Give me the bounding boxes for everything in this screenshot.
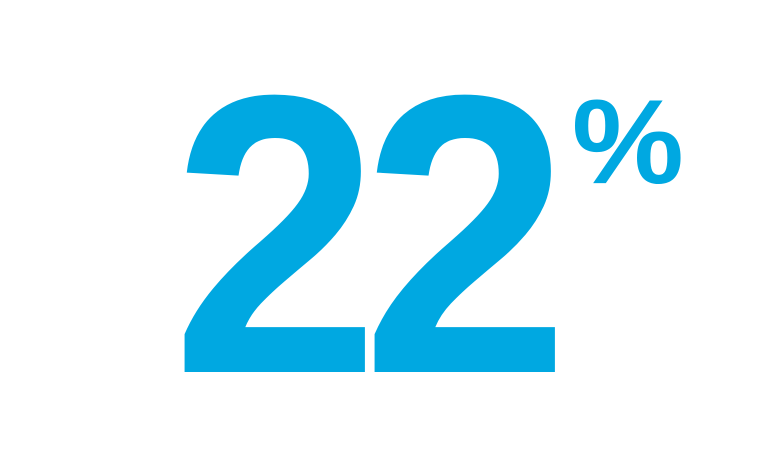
percent sign: %: [572, 76, 684, 209]
big number: 22: [172, 12, 570, 456]
big number: 22: 2: [172, 12, 380, 456]
big number: 22: 2: [362, 12, 570, 456]
